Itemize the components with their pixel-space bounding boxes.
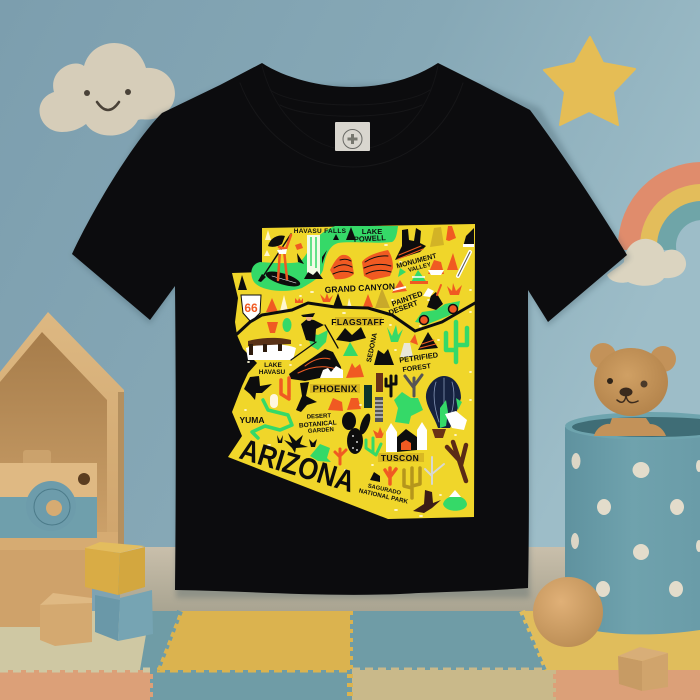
small cacti near skyscrapers [386,375,423,424]
label: Yuma: YUMA [239,415,265,425]
mission church [386,422,427,452]
car with driver [415,285,460,324]
hiker [291,313,338,360]
background wall [0,0,700,548]
label: Sedona: SEDONA [366,332,379,363]
label: Havasu Falls: HAVASU FALLS [294,228,347,235]
neck label [335,122,370,151]
painted desert striped mounds [392,268,428,293]
monument valley butte [395,228,426,260]
label: Monument: MONUMENT [396,253,438,270]
green snake [252,400,292,438]
paddle cactus with dots [342,412,373,454]
black T-shirt [72,63,627,595]
storage bucket with polka dots [565,412,700,634]
southern cacti [335,442,467,513]
black agave plants [277,433,317,453]
waterfall [304,235,323,279]
label: Valley: VALLEY [408,262,432,274]
label: Painted: PAINTED [390,289,424,308]
flagstaff rocks and plants [336,325,438,365]
label: Powell: POWELL [354,233,387,244]
paddle boarder [258,234,302,290]
label: Desert: DESERT [387,298,419,317]
rainbow with cloud [607,162,700,286]
label: Lake Powell: LAKE [362,227,382,236]
floor mats [0,611,700,700]
small wooden block [618,647,668,691]
label: National Park: NATIONAL PARK [358,487,409,506]
south west plants [244,376,317,412]
label: Petrified: PETRIFIED [399,350,439,365]
label: Garden: GARDEN [308,427,334,435]
toy camera [0,450,97,538]
label: Havasu: HAVASU [259,369,286,376]
black leaf and tree accents [264,227,356,264]
route 66 shield [241,295,261,322]
label: Arizona: ARIZONA [236,433,358,499]
shirt shadow [72,84,630,598]
label: Tuscon: TUSCON [381,453,419,463]
label: Sagurado: SAGURADO [367,483,402,497]
orange plant [447,283,462,295]
grand canyon rock formations [330,250,393,280]
route 66 shield: 66 [244,301,258,315]
shirt collar [240,66,463,167]
teddy bear [590,343,676,436]
label: Desert: DESERT [307,413,332,421]
lake havasu bridge [246,318,296,360]
map shape [228,224,475,519]
Arizona illustrated map [228,224,475,519]
phoenix mountain and skyline [289,349,343,381]
green saguaro cactus [446,322,467,362]
green and orange desert plants [366,427,385,455]
skyscrapers [364,373,383,422]
baseboard [120,547,590,611]
green striped melon [310,444,331,462]
wooden house shelf [0,312,124,627]
wooden ball [533,577,603,647]
label: Phoenix: PHOENIX [313,384,358,395]
cloud with smiling face [40,43,175,136]
hot air balloon [426,376,467,438]
green river and lake [251,226,398,291]
label: Forest: FOREST [402,363,432,374]
star [544,37,635,125]
label: Botanical: BOTANICAL [299,419,337,430]
stacked toy blocks [40,542,153,646]
highway road line [237,303,475,334]
white and orange confetti marks [245,245,471,516]
row of small trees [238,275,390,312]
north east icons [428,226,474,276]
label: Lake Havasu: LAKE [264,362,283,369]
phoenix orange rocks [328,363,364,411]
flagstaff label: FLAGSTAFF [331,317,385,327]
label: Grand Canyon: GRAND CANYON [324,281,395,295]
place names [236,227,439,506]
